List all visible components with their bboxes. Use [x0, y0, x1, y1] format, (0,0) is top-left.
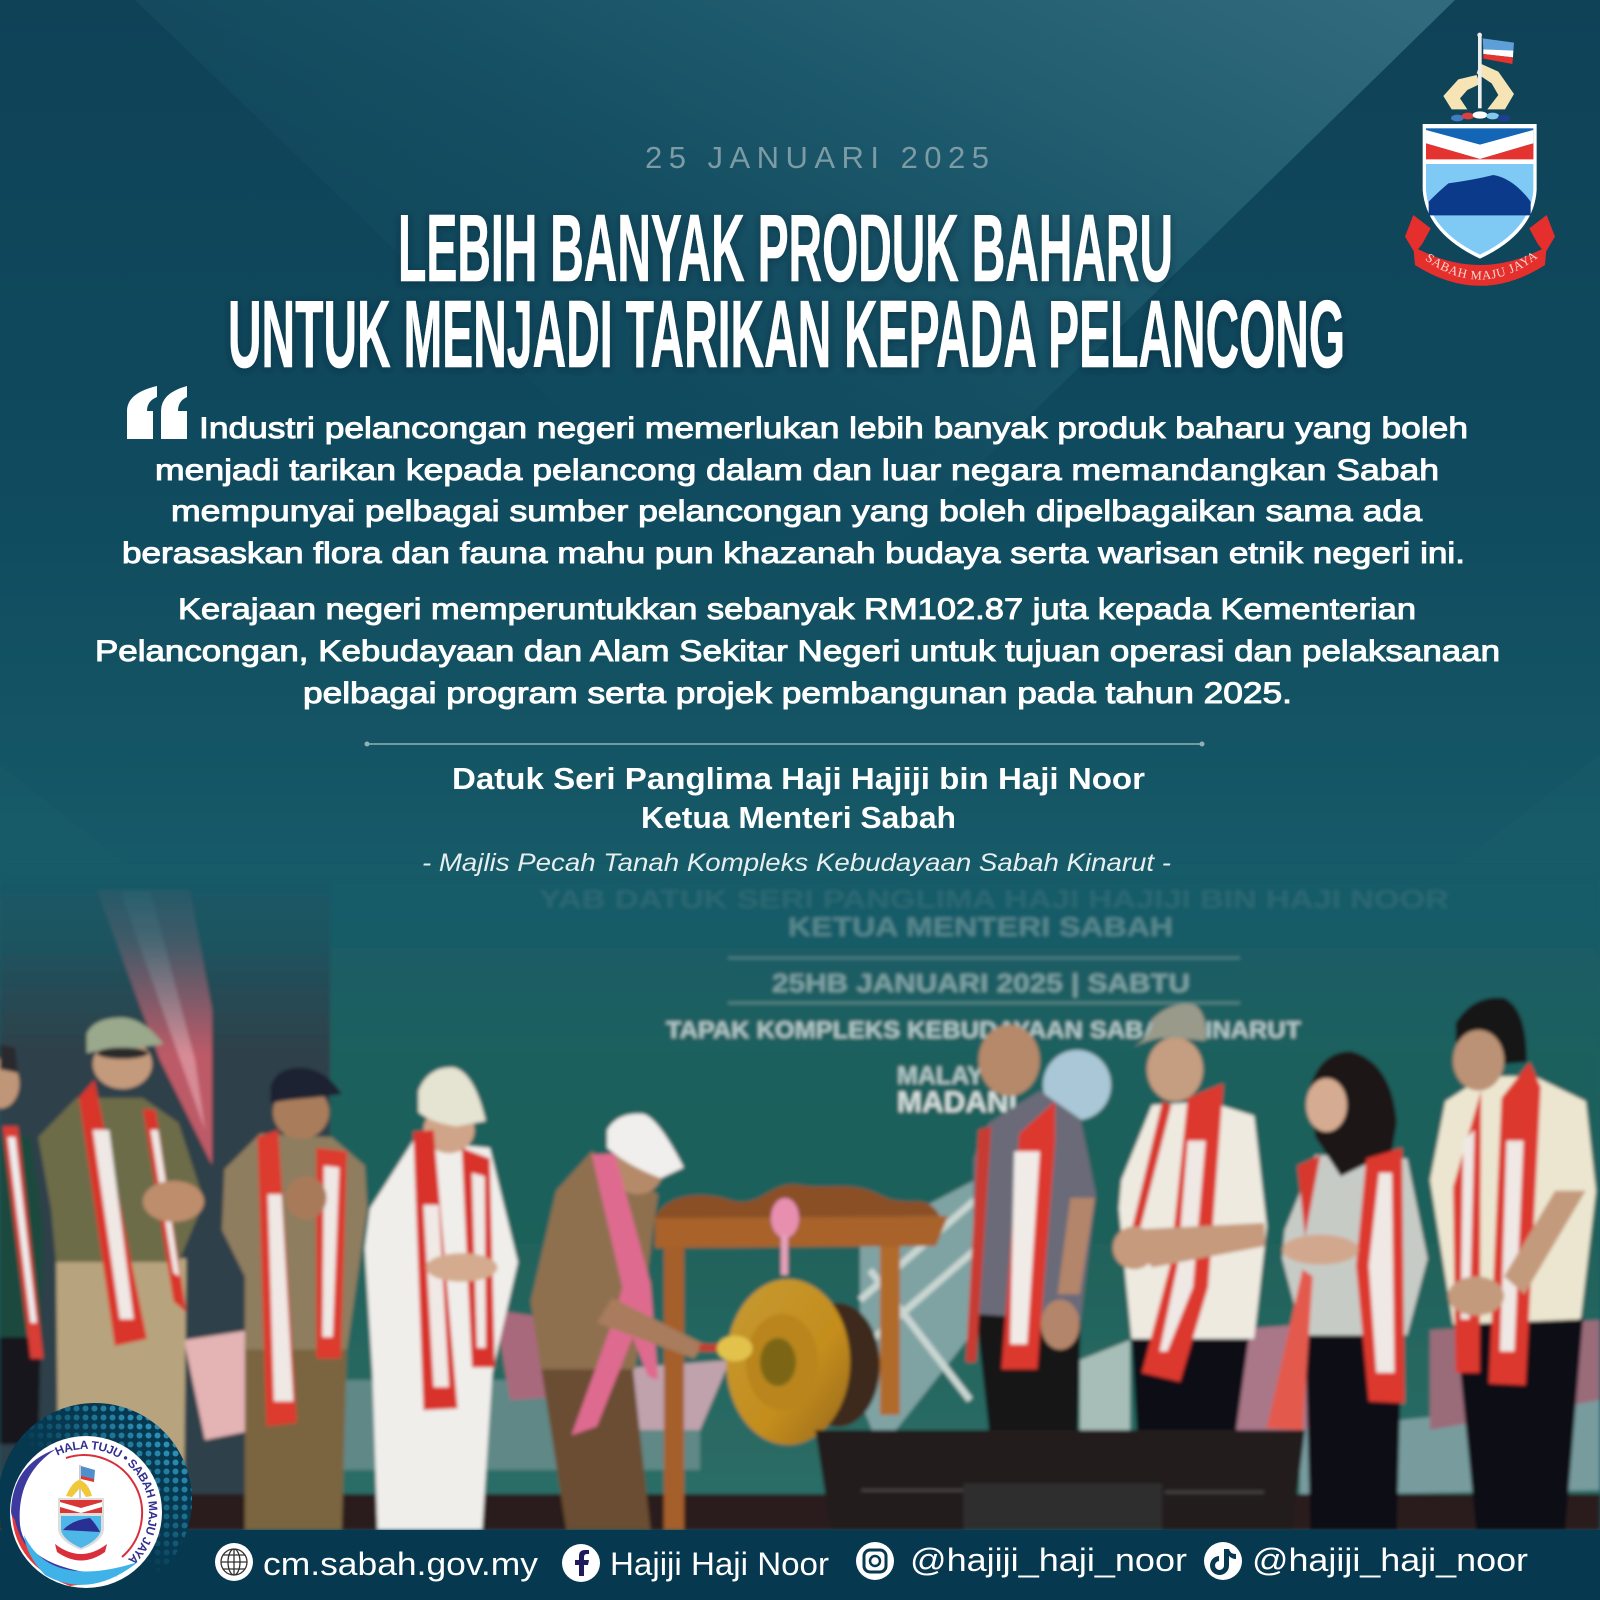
screen text — [539, 884, 1449, 1120]
screen text: KETUA MENTERI SABAH — [788, 912, 1173, 942]
flag and arms — [1443, 33, 1514, 121]
quote paragraph two: Pelancongan, Kebudayaan dan Alam Sekitar Negeri untuk tujuan operasi dan pelaksanaan — [95, 635, 1500, 668]
speaker attribution: Datuk Seri Panglima Haji Hajiji bin Haji Noor — [452, 761, 1145, 796]
person: olive shirt — [38, 1017, 204, 1530]
motto ribbon — [1404, 215, 1556, 286]
person: cream shirt — [1430, 997, 1596, 1530]
date: 25 JANUARI 2025 — [645, 140, 989, 175]
quote paragraph one: menjadi tarikan kepada pelancong dalam dan luar negara memandangkan Sabah — [155, 454, 1439, 487]
emblem: Hala Tuju Sabah Maju Jaya: HALA TUJU • SABAH MAJU JAYA — [54, 1440, 158, 1563]
quote paragraph one: mempunyai pelbagai sumber pelancongan yang boleh dipelbagaikan sama ada — [171, 495, 1422, 528]
icon: quotation mark — [127, 386, 187, 439]
screen text: TAPAK KOMPLEKS KEBUDAYAAN SABAH KINARUT — [666, 1017, 1301, 1044]
speaker attribution: Ketua Menteri Sabah — [641, 800, 956, 835]
speaker attribution — [452, 761, 1145, 835]
quote paragraph two — [95, 593, 1500, 710]
crest: Sabah coat of arms — [1404, 32, 1556, 286]
quote paragraph two: pelbagai program serta projek pembangunan pada tahun 2025. — [303, 677, 1292, 710]
event name: - Majlis Pecah Tanah Kompleks Kebudayaan Sabah Kinarut - — [422, 849, 1171, 877]
monitor on stage — [815, 1430, 1305, 1530]
quote paragraph one — [122, 412, 1468, 570]
shield — [1423, 124, 1537, 259]
screen text: YAB DATUK SERI PANGLIMA HAJI HAJIJI BIN HAJI NOOR — [539, 884, 1449, 914]
screen text: 25HB JANUARI 2025 | SABTU — [772, 968, 1190, 998]
people, right group — [815, 997, 1596, 1530]
screen text: MALAYSIA — [897, 1062, 1025, 1090]
footer bar — [0, 1530, 1600, 1600]
screen text: MADANI — [897, 1086, 1017, 1119]
footer: website: cm.sabah.gov.my — [263, 1546, 538, 1582]
emblem: Hala Tuju Sabah Maju Jaya — [0, 1403, 192, 1588]
person: dark cap — [222, 1067, 367, 1530]
person: far left — [0, 1044, 43, 1444]
people, left group — [0, 1017, 753, 1530]
fade into page background — [0, 865, 1600, 1055]
quote paragraph two: Kerajaan negeri memperuntukkan sebanyak RM102.87 juta kepada Kementerian — [178, 593, 1416, 626]
quote paragraph one: berasaskan flora dan fauna mahu pun khazanah budaya serta warisan etnik negeri ini. — [122, 537, 1465, 570]
footer: instagram: @hajiji_haji_noor — [910, 1542, 1187, 1578]
person: white outfit — [365, 1067, 518, 1530]
person: striking the gong — [531, 1114, 753, 1530]
person: grey cap — [1113, 1004, 1267, 1430]
motto ribbon: SABAH MAJU JAYA — [1426, 253, 1538, 280]
event photo — [0, 865, 1600, 1530]
stage screen backdrop — [0, 865, 1600, 1530]
person: woman with dark hair — [1267, 1051, 1428, 1530]
quote paragraph one: Industri pelancongan negeri memerlukan lebih banyak produk baharu yang boleh — [199, 412, 1468, 445]
footer: tiktok: @hajiji_haji_noor — [1252, 1542, 1528, 1578]
gong — [726, 1279, 880, 1445]
mini crest — [55, 1465, 107, 1560]
person: grey shirt — [966, 1025, 1096, 1430]
screen house artwork — [184, 1180, 1600, 1495]
gong stand — [655, 1184, 948, 1530]
footer: facebook: Hajiji Haji Noor — [610, 1546, 829, 1582]
title — [228, 195, 1345, 388]
